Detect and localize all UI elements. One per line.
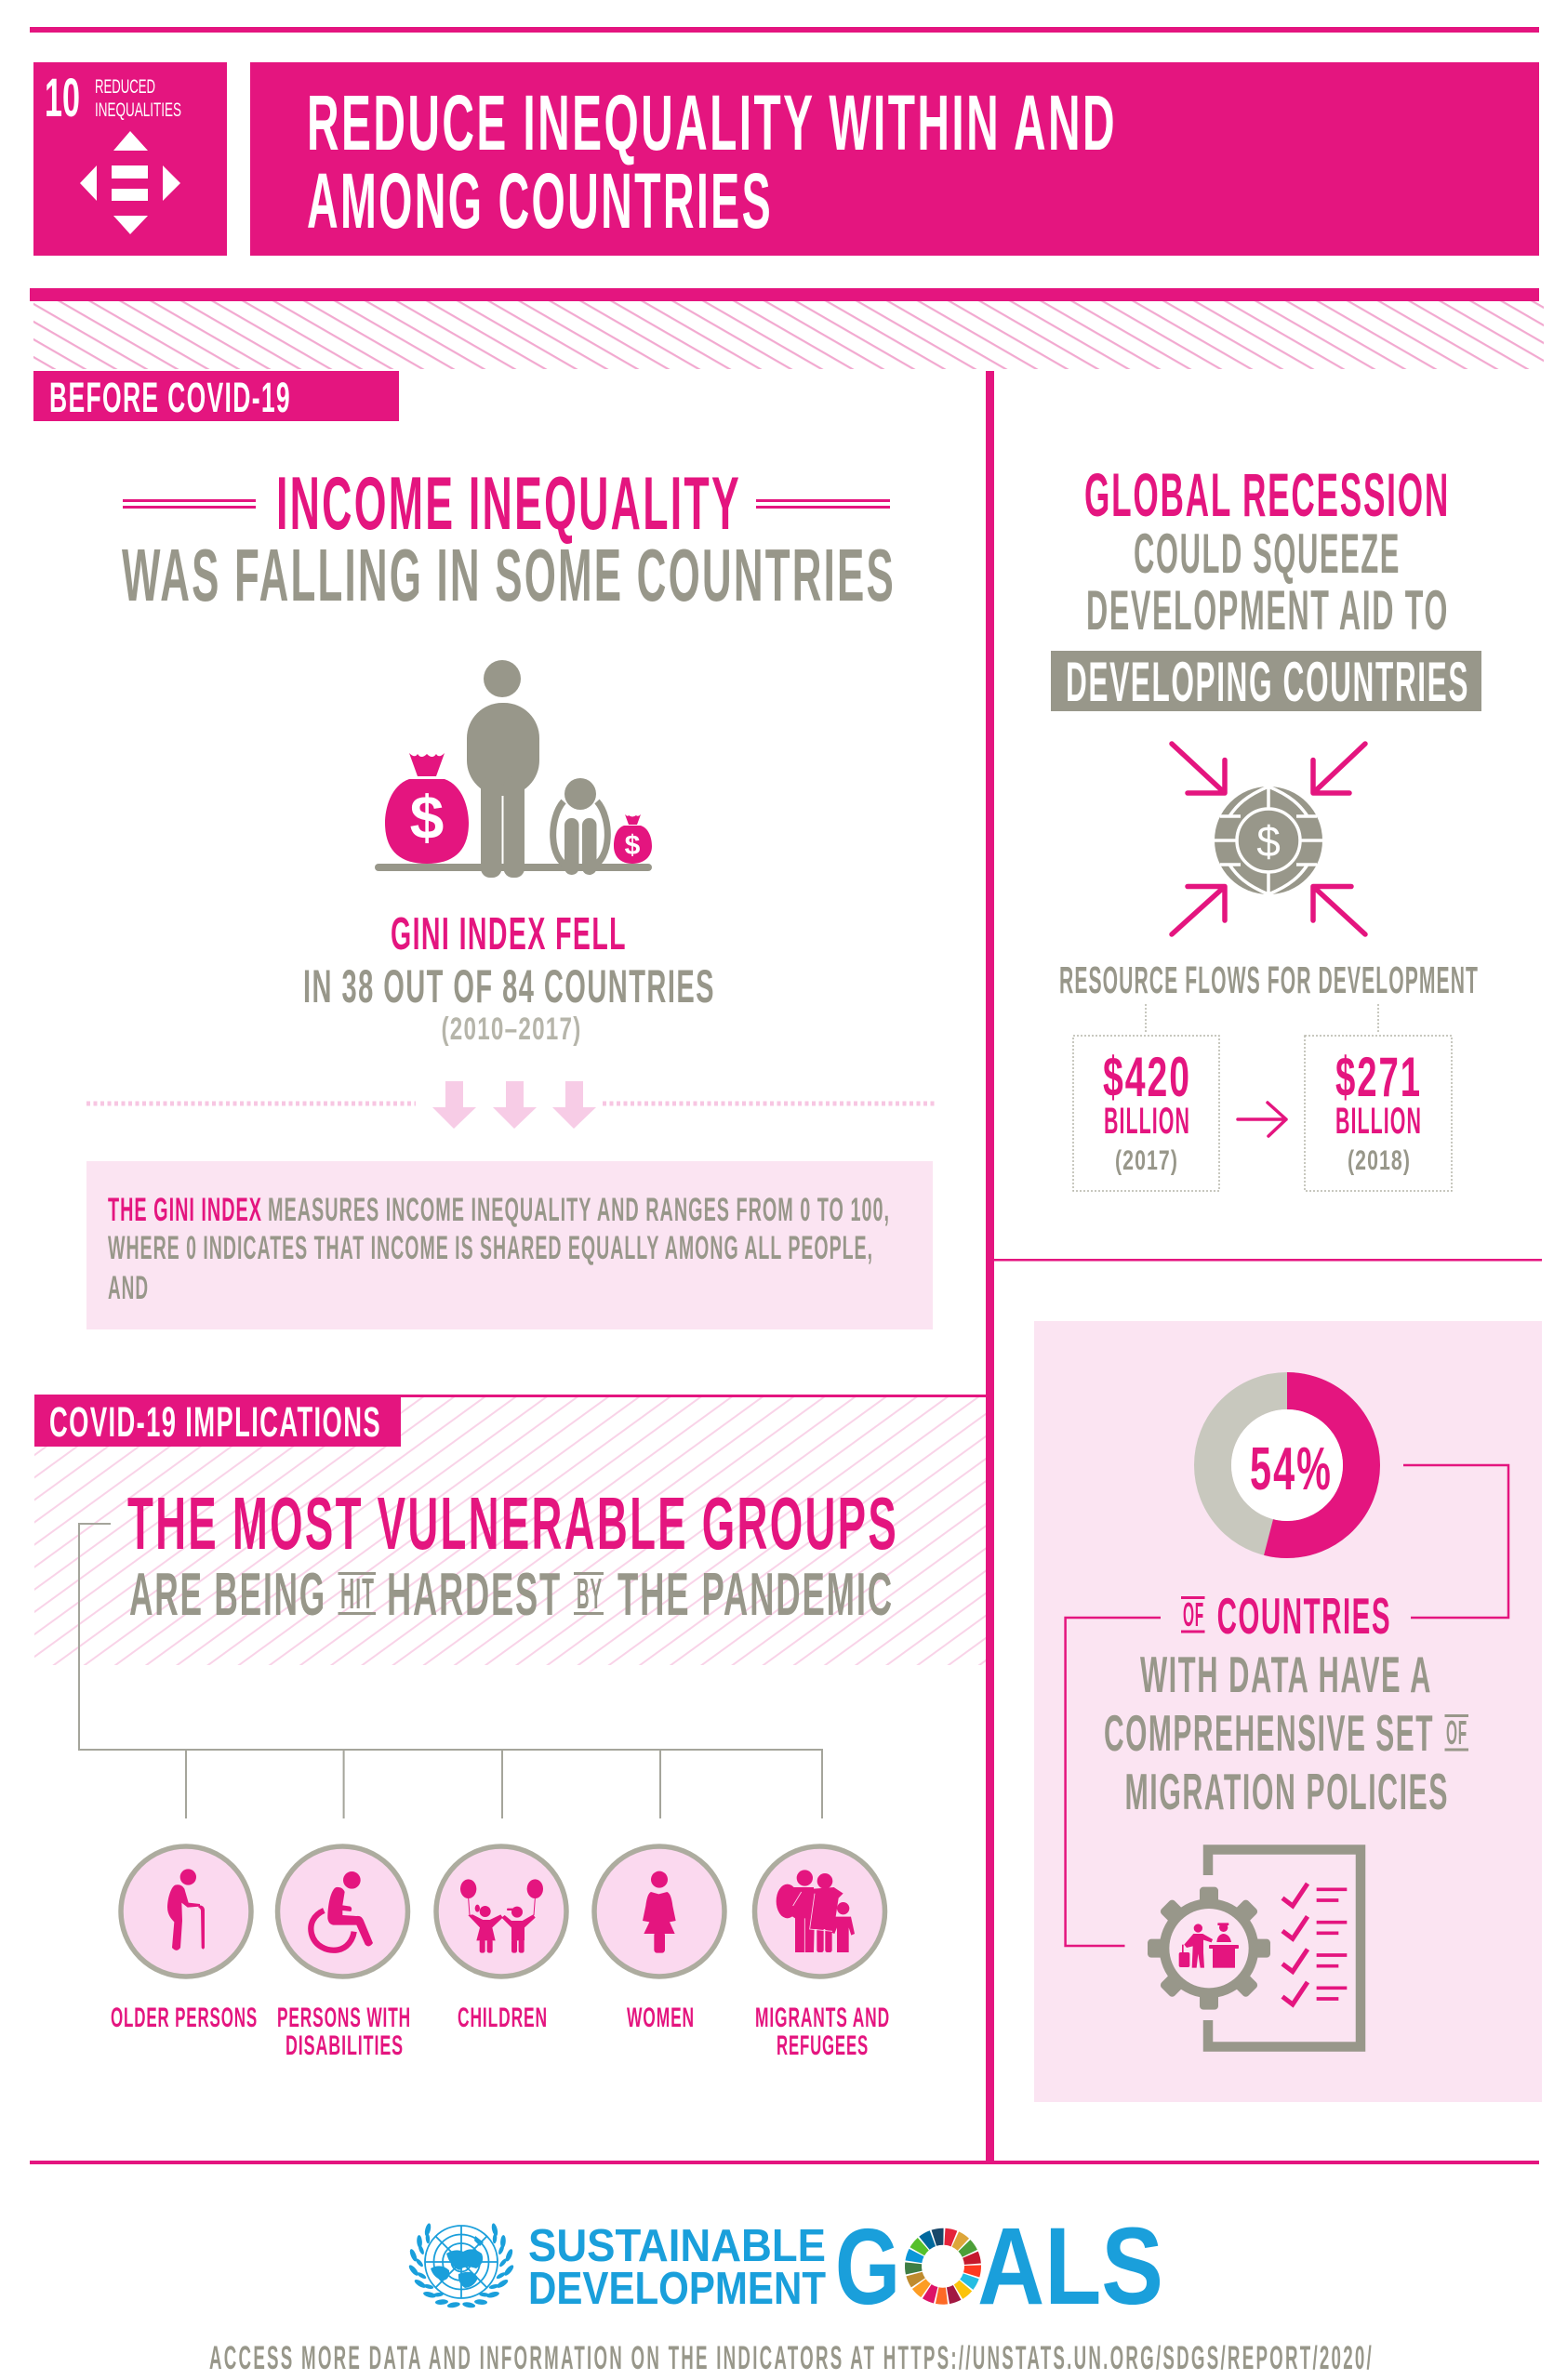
text: countries with data <box>1104 1587 1468 1820</box>
group: children <box>436 1846 566 2033</box>
icon: migration policy checklist with gear <box>1148 1850 1361 2047</box>
goal 10 badge: 10 <box>45 68 80 128</box>
arrow: decline between years <box>1238 1103 1286 1136</box>
stat: $420 billion 2017: (2017) <box>1115 1145 1178 1176</box>
wordmark: sustainable development: DEVELOPMENT <box>528 2264 826 2314</box>
callout: gini index definition: AND <box>108 1270 149 1306</box>
text: gini index fell: GINI INDEX FELL <box>391 909 627 959</box>
callout: gini index definition: THE GINI INDEX <box>108 1192 262 1228</box>
wordmark: goals with sdg colour wheel: G <box>835 2206 900 2327</box>
panel: income inequality <box>86 462 935 1329</box>
text: gini index fell: (2010–2017) <box>441 1012 582 1047</box>
goal 10 badge: INEQUALITIES <box>95 99 181 121</box>
heading: most vulnerable groups: THE PANDEMIC <box>618 1560 894 1628</box>
callout: gini index definition <box>86 1161 933 1329</box>
text: countries with data: OF <box>1183 1595 1204 1633</box>
stat: $420 billion 2017: $420 <box>1103 1046 1191 1108</box>
text: countries with data: COUNTRIES <box>1217 1587 1391 1645</box>
stat: $271 billion 2018: BILLION <box>1335 1101 1422 1142</box>
group: migrants and refugees: REFUGEES <box>777 2030 869 2061</box>
group: women <box>594 1846 724 2033</box>
group: persons with disabilities: PERSONS WITH <box>277 2003 411 2033</box>
group: older persons: OLDER PERSONS <box>111 2003 258 2033</box>
callout: gini index definition: WHERE 0 INDICATES THAT INCOME IS SHARED EQUALLY AMONG ALL PEOPLE, <box>108 1230 873 1266</box>
heading: most vulnerable groups: BY <box>577 1569 603 1618</box>
covid-19 implications label <box>34 1395 401 1447</box>
title banner <box>250 62 1539 256</box>
stat: $420 billion 2017 <box>1073 1036 1219 1191</box>
wordmark: goals with sdg colour wheel: ALS <box>977 2205 1163 2328</box>
group: children: CHILDREN <box>458 2003 548 2033</box>
group: persons with disabilities: DISABILITIES <box>286 2030 404 2061</box>
donut chart: 54% <box>1213 1391 1361 1540</box>
connector lines to groups <box>79 1524 822 1818</box>
before covid-19 label: BEFORE COVID-19 <box>49 374 291 421</box>
panel: covid-19 implications <box>34 1395 988 2061</box>
donut chart: 54%: 54% <box>1250 1435 1333 1502</box>
panel: global recession <box>1051 460 1481 1191</box>
group: older persons <box>111 1846 258 2033</box>
wordmark: goals with sdg colour wheel <box>835 2205 1163 2328</box>
icon: un emblem <box>407 2223 515 2308</box>
heading: most vulnerable groups: HIT <box>340 1569 375 1618</box>
logo: sustainable development goals <box>407 2205 1163 2328</box>
icon: globe with dollar and inward arrows <box>1172 744 1365 934</box>
goal 10 badge: REDUCED <box>95 76 155 98</box>
heading: income inequality: INCOME INEQUALITY <box>276 462 741 546</box>
panel: migration policies: OF <box>1446 1713 1467 1752</box>
group: migrants and refugees: MIGRANTS AND <box>755 2003 890 2033</box>
goal 10 badge <box>33 62 227 256</box>
title banner: AMONG COUNTRIES <box>307 157 773 245</box>
callout: gini index definition: MEASURES INCOME INEQUALITY AND RANGES FROM 0 TO 100, <box>268 1192 890 1228</box>
heading: income inequality: WAS FALLING IN SOME COUNTRIES <box>122 534 896 616</box>
wordmark: sustainable development: SUSTAINABLE <box>528 2221 826 2271</box>
stat: $271 billion 2018: $271 <box>1335 1046 1422 1108</box>
heading: most vulnerable groups: THE MOST VULNERABLE GROUPS <box>127 1482 898 1565</box>
heading: most vulnerable groups <box>127 1482 898 1628</box>
stat: $420 billion 2017: BILLION <box>1104 1101 1190 1142</box>
wordmark: sustainable development <box>528 2221 826 2314</box>
text: gini index fell <box>303 909 715 1047</box>
icon: rich and poor figures with money bags <box>375 660 652 878</box>
heading: most vulnerable groups: ARE BEING <box>129 1560 326 1628</box>
icon: rich and poor figures with money bags: $ <box>410 783 444 852</box>
group: migrants and refugees <box>755 1846 890 2061</box>
icon: globe with dollar and inward arrows: $ <box>1256 817 1281 866</box>
text: gini index fell: IN 38 OUT OF 84 COUNTRIES <box>303 960 715 1012</box>
heading: income inequality <box>122 462 896 616</box>
group: women: WOMEN <box>627 2003 695 2033</box>
stat: $271 billion 2018 <box>1305 1036 1452 1191</box>
heading: most vulnerable groups: HARDEST <box>387 1560 562 1628</box>
covid-19 implications label: COVID-19 IMPLICATIONS <box>49 1398 381 1446</box>
panel: migration policies <box>1034 1321 1542 2102</box>
heading: global recession <box>1051 460 1481 713</box>
stat: $271 billion 2018: (2018) <box>1348 1145 1411 1176</box>
icon: rich and poor figures with money bags: $ <box>625 830 641 861</box>
arrows: three down arrows <box>432 1081 596 1129</box>
group: persons with disabilities <box>277 1846 411 2061</box>
